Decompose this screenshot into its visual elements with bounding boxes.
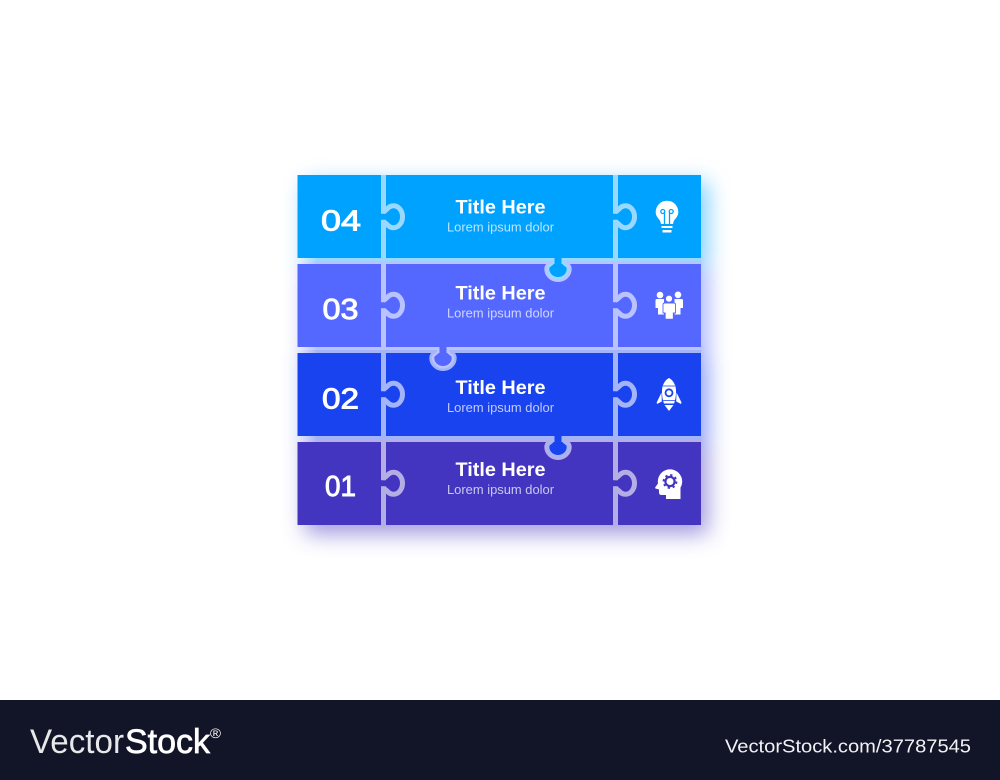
puzzle tab 03 into 02 [432, 350, 454, 368]
icon: team of people [656, 292, 683, 319]
number 02: 02 [322, 383, 359, 415]
puzzle tab 02 into 01 [547, 439, 569, 458]
piece 04 background [298, 175, 701, 261]
footer bar [0, 700, 1000, 780]
VectorStock logo: Stock [125, 723, 211, 761]
row 03 [298, 261, 701, 368]
icon: rocket [657, 378, 682, 411]
icon: head with gear [655, 469, 682, 499]
number 03: 03 [322, 294, 358, 326]
title 04: Title Here [456, 196, 546, 218]
subtitle 04: Lorem ipsum dolor [447, 221, 554, 235]
icon: light bulb [656, 201, 678, 232]
VectorStock logo: Vector [30, 723, 124, 761]
subtitle 01: Lorem ipsum dolor [447, 483, 554, 497]
title 02: Title Here [456, 377, 546, 399]
subtitle 03: Lorem ipsum dolor [447, 307, 554, 321]
title 03: Title Here [456, 282, 546, 304]
coloured glow behind puzzle [305, 182, 708, 534]
number 01: 01 [325, 471, 356, 503]
number 04: 04 [321, 206, 361, 238]
piece 02 background [298, 350, 701, 439]
puzzle seams and tab outlines [298, 175, 701, 525]
row 04 [298, 175, 701, 280]
title 01: Title Here [456, 459, 546, 481]
registered mark: ® [210, 725, 222, 741]
row 02 [298, 350, 701, 458]
piece 01 background [298, 439, 701, 525]
row 01 [298, 439, 701, 525]
puzzle tab 04 into 03 [547, 261, 569, 280]
image id url: VectorStock.com/37787545 [725, 736, 971, 756]
piece 03 background [298, 261, 701, 350]
VectorStock logo [30, 723, 211, 761]
subtitle 02: Lorem ipsum dolor [447, 401, 554, 415]
